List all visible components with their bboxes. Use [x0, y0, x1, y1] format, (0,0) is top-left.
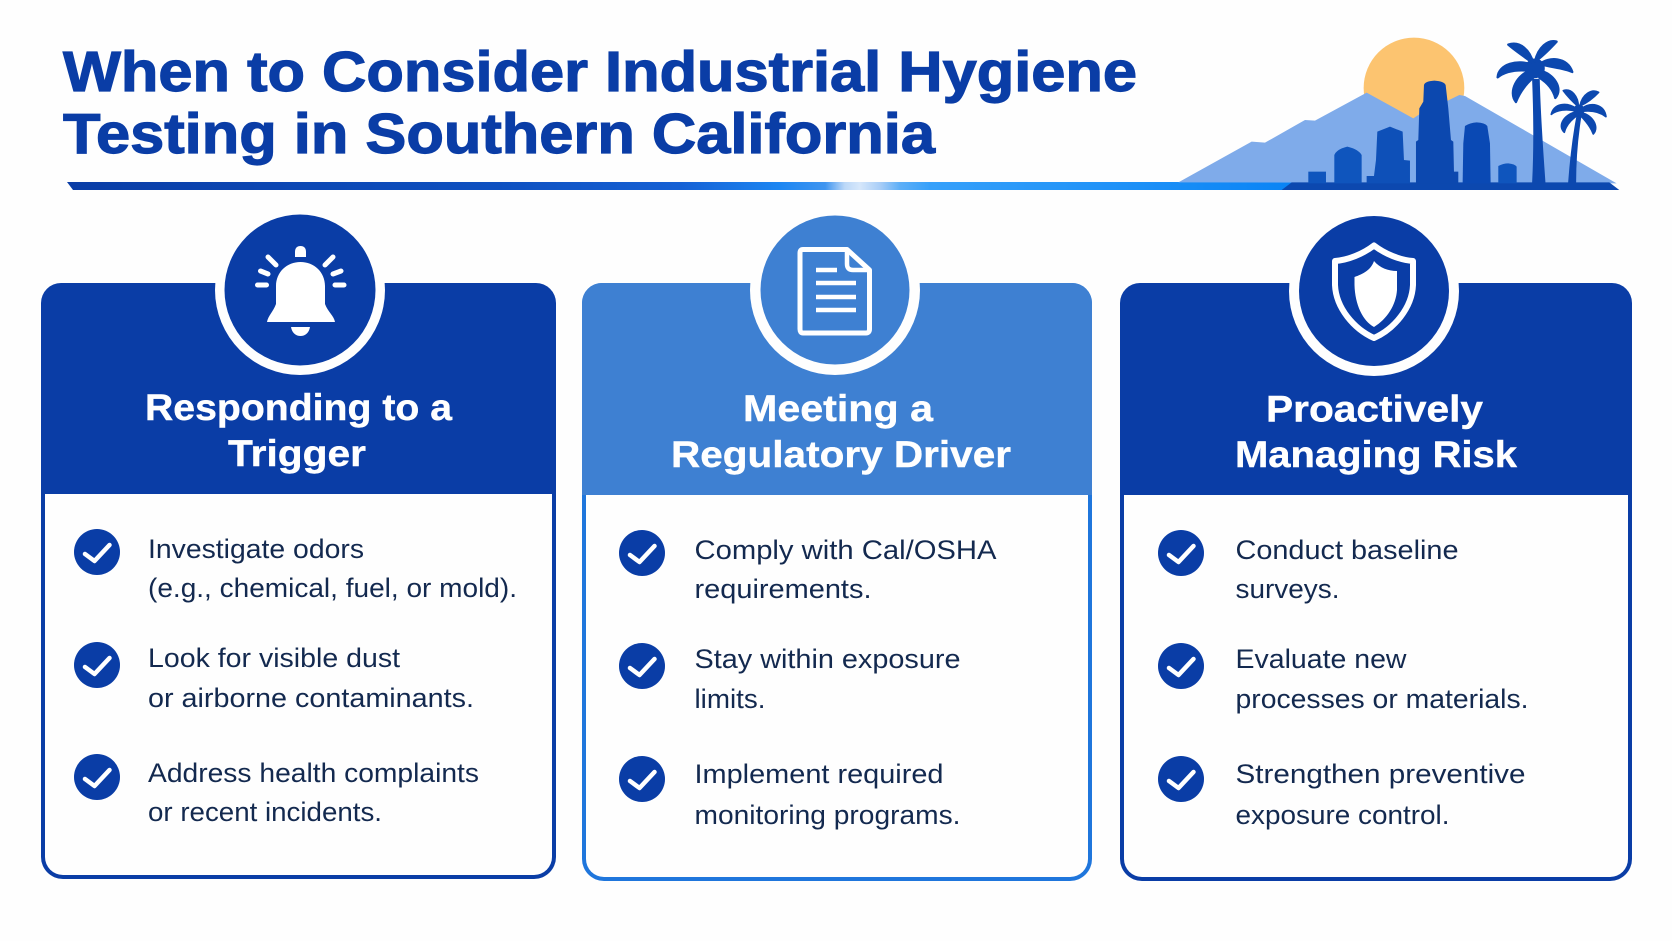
check item: new processes [1158, 643, 1528, 714]
check item: preventive control [1158, 756, 1526, 830]
check item: health complaints [74, 754, 479, 827]
check item: visible dust [74, 642, 474, 713]
card 1 heading [145, 387, 452, 474]
illustration: Los Angeles skyline with mountains, sun and palms [1178, 38, 1619, 190]
check item: Cal/OSHA: requirements. [694, 574, 872, 604]
check item: health complaints: Address health complaints [148, 758, 479, 788]
check item: baseline surveys [1158, 530, 1458, 604]
check item: monitoring programs [619, 756, 960, 830]
icon: document [750, 205, 920, 375]
check item: monitoring programs: Implement required [694, 759, 944, 789]
check item: investigate odors: (e.g., chemical, fuel, or mold). [148, 573, 517, 603]
panel: meeting a regulatory driver [582, 205, 1092, 881]
card 3 heading: Proactively [1266, 388, 1483, 430]
title: Testing in Southern California [63, 102, 936, 166]
card 3 heading [1235, 388, 1517, 475]
check item: visible dust: or airborne contaminants. [148, 683, 474, 713]
card 1 heading: Trigger [228, 433, 366, 474]
mountains [1178, 93, 1617, 183]
check item: investigate odors: Investigate odors [148, 534, 364, 564]
panel: responding to a trigger [41, 205, 556, 879]
check item: visible dust: Look for visible dust [148, 643, 401, 673]
card 3 heading: Managing Risk [1235, 434, 1517, 475]
card 2 heading [671, 388, 1011, 475]
icon: bell [215, 205, 385, 375]
check item: Cal/OSHA: Comply with Cal/OSHA [694, 535, 996, 565]
check item: baseline surveys: surveys. [1236, 574, 1340, 604]
large palm tree [1498, 41, 1572, 183]
check item: new processes: Evaluate new [1236, 644, 1407, 674]
card 2 heading: Meeting a [743, 388, 933, 429]
check item: exposure limits [619, 643, 960, 714]
title underline rule [67, 182, 1300, 190]
title [63, 40, 1137, 166]
check item: new processes: processes or materials. [1236, 684, 1528, 714]
card 1 frame and header [41, 283, 556, 879]
check item: monitoring programs: monitoring programs. [694, 800, 960, 830]
check item: exposure limits: limits. [694, 684, 766, 714]
icon: shield [1289, 206, 1459, 376]
check item: health complaints: or recent incidents. [148, 797, 382, 827]
card 2 heading: Regulatory Driver [671, 434, 1011, 475]
check item: Cal/OSHA [619, 530, 996, 604]
check item: exposure limits: Stay within exposure [694, 644, 960, 674]
skyline buildings [1282, 81, 1619, 190]
small palm tree [1551, 90, 1606, 183]
check item: preventive control: exposure control. [1236, 800, 1450, 830]
title: When to Consider Industrial Hygiene [63, 40, 1137, 104]
check item: preventive control: Strengthen preventive [1236, 759, 1526, 789]
check item: investigate odors [74, 529, 517, 603]
panel: proactively managing risk [1120, 206, 1632, 881]
card 1 heading: Responding to a [145, 387, 452, 428]
card 3 frame and header [1120, 283, 1632, 881]
sun [1364, 38, 1464, 138]
check item: baseline surveys: Conduct baseline [1236, 535, 1458, 565]
card 2 frame and header [582, 283, 1092, 881]
